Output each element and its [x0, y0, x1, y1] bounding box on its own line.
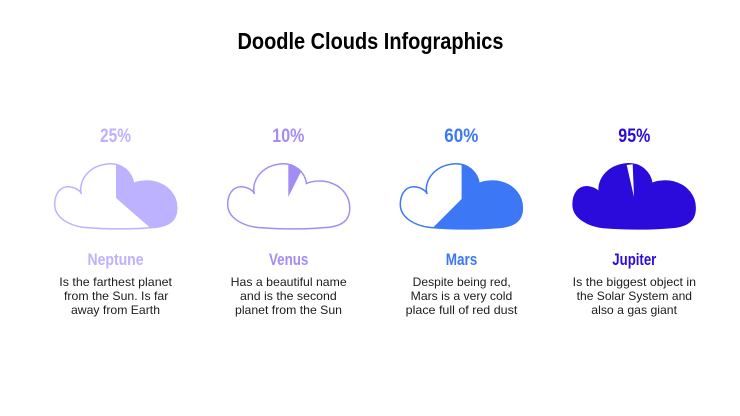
description: Neptune: Is the farthest planet [59, 275, 173, 289]
cloud chart: Jupiter [573, 164, 695, 229]
percentage: Venus 10%: 10% [272, 126, 304, 147]
cloud chart: Mars [400, 163, 524, 230]
description: Neptune [59, 275, 173, 317]
description: Jupiter: Is the biggest object in [573, 275, 696, 289]
description: Venus: and is the second [240, 289, 337, 303]
cloud chart: Venus [226, 163, 350, 230]
name: Jupiter: Jupiter [612, 250, 657, 269]
description: Neptune: away from Earth [71, 303, 160, 317]
name: Venus: Venus [269, 250, 308, 269]
percentage: Neptune 25%: 25% [100, 126, 131, 147]
description: Neptune: from the Sun. Is far [64, 289, 168, 303]
cloud chart: Neptune [54, 163, 178, 230]
description: Venus: Has a beautiful name [231, 275, 347, 289]
name: Neptune: Neptune [88, 250, 144, 269]
title: Doodle Clouds Infographics [238, 28, 504, 54]
panel: Neptune [54, 128, 178, 316]
percentage: Jupiter 95%: 95% [618, 126, 650, 147]
description: Mars [406, 275, 518, 317]
panel: Mars [400, 128, 524, 316]
panel: Venus [228, 126, 350, 317]
description: Venus [231, 275, 347, 317]
description: Jupiter: also a gas giant [591, 303, 678, 317]
percentage: Mars 60%: 60% [444, 126, 478, 147]
description: Mars: Mars is a very cold [411, 289, 512, 303]
description: Mars: Despite being red, [413, 275, 511, 289]
description: Jupiter [573, 275, 696, 317]
name: Mars: Mars [446, 250, 477, 269]
description: Venus: planet from the Sun [235, 303, 342, 317]
description: Mars: place full of red dust [406, 303, 518, 317]
panel: Jupiter [573, 126, 696, 317]
description: Jupiter: the Solar System and [577, 289, 692, 303]
